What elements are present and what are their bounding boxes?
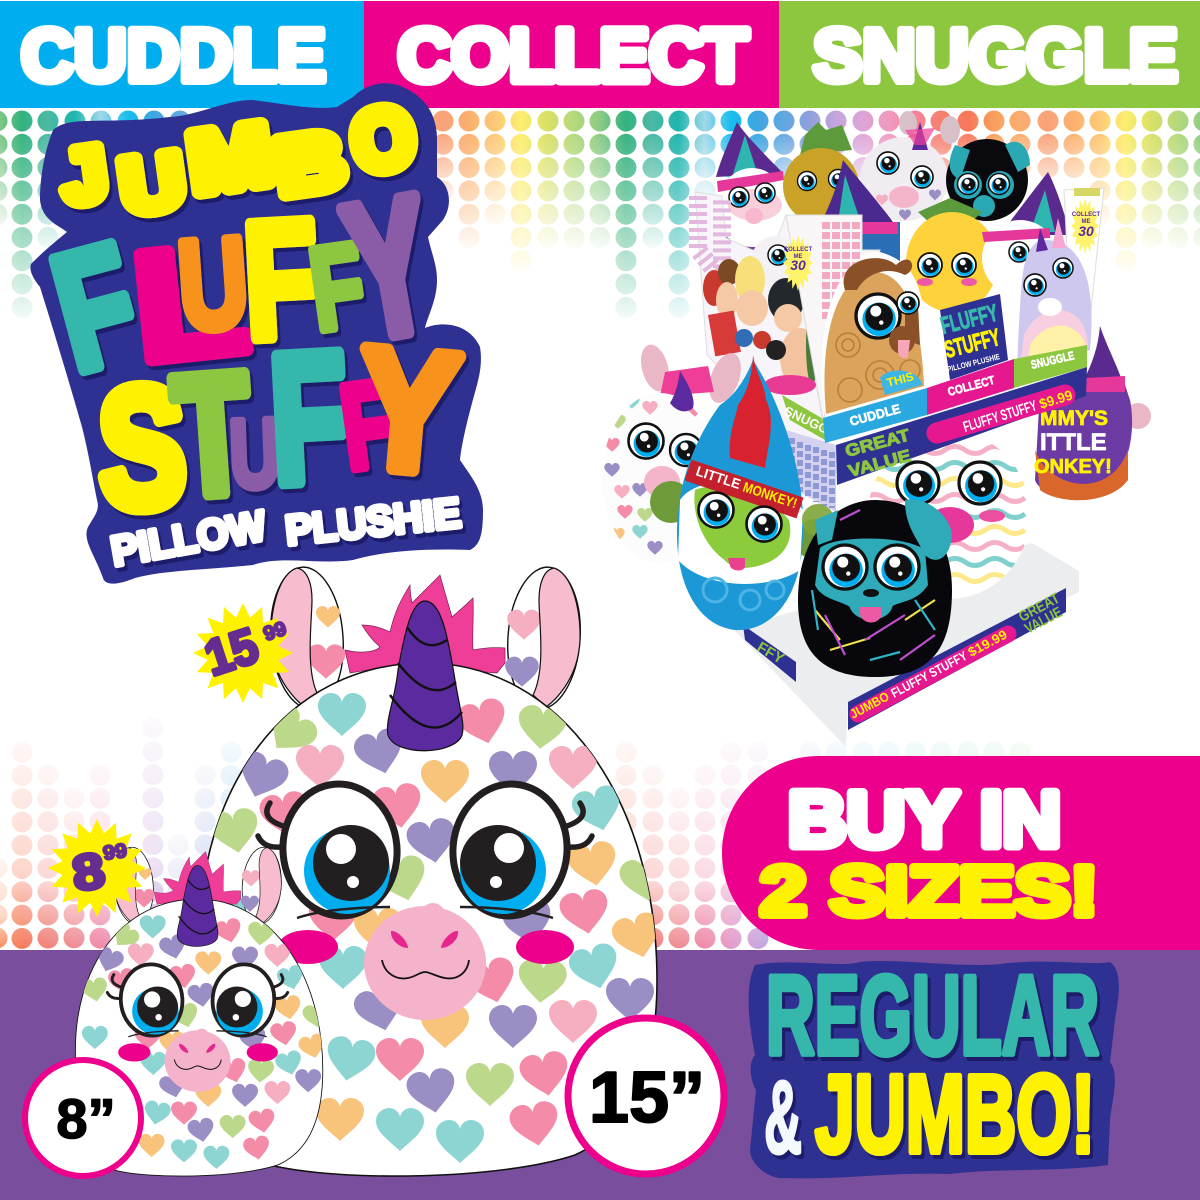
display base tray: FLUFFY STUFFY — [888, 648, 970, 701]
peeking unicorn — [751, 236, 799, 288]
panel: snuggle: SNUGGLE — [813, 14, 1178, 97]
logo word: fluffy: Y — [332, 156, 447, 379]
label: collect: COLLECT — [946, 373, 997, 399]
panel text: snuggle: SNUGGLE — [782, 403, 847, 444]
display stand with plushies — [602, 111, 1151, 747]
horn — [387, 601, 463, 751]
size badge: 8 inch — [25, 1060, 141, 1176]
logo word: jumbo — [56, 89, 421, 231]
body — [199, 663, 657, 1176]
label: navy price band: $9.99 — [1037, 387, 1075, 412]
purple floor band — [0, 950, 1200, 1200]
price burst: 8.99: 99 — [102, 840, 128, 865]
label: navy price band: VALUE — [846, 446, 913, 481]
mane — [345, 575, 505, 673]
logo backing — [30, 83, 483, 584]
logo word: stuffy: S — [95, 352, 189, 545]
plush: left unicorn — [604, 344, 741, 555]
price burst: 15.99 — [193, 603, 293, 703]
plush: black dog back — [946, 139, 1030, 221]
logo word: stuffy: F — [333, 356, 403, 496]
price burst: 8.99: 8 — [69, 842, 108, 902]
plush: brown dog card: THIS — [885, 369, 915, 390]
size badge: 8 inch: 8” — [56, 1087, 116, 1150]
logo: jumbo fluffy stuffy pillow plushie — [30, 83, 483, 584]
display base tray — [736, 543, 1079, 747]
label: navy price band: FLUFFY STUFFY — [961, 397, 1039, 436]
size badge: 15 inch: 15” — [589, 1058, 705, 1138]
plush: black splatter dog — [798, 499, 952, 677]
lower equalizer dots — [0, 712, 1033, 950]
plush: pink monkey back — [716, 122, 788, 250]
text: 2 sizes: 2 SIZES! — [760, 852, 1098, 930]
panel: right card burst: COLLECT — [1072, 212, 1100, 218]
plush: brown dog card — [822, 252, 928, 418]
logo word: fluffy: L — [125, 211, 256, 395]
display label band — [823, 345, 1087, 485]
top rainbow dots — [0, 121, 1200, 318]
plush: yellow pineapple — [906, 198, 998, 312]
pink pill: buy in 2 sizes — [722, 756, 1200, 950]
burst: collect me 30 left: 30 — [790, 257, 806, 273]
left eye — [258, 779, 403, 921]
panel: right card burst: 30 — [1078, 223, 1094, 239]
label: snuggle — [1014, 345, 1087, 388]
logo word: stuffy: Y — [350, 311, 466, 509]
logo subtitle: pillow plushie: PLUSHIE — [283, 489, 463, 554]
plush: wave striped — [870, 444, 1026, 599]
logo: regular and jumbo — [749, 953, 1119, 1178]
panel: cuddle: CUDDLE — [21, 14, 326, 97]
plush: mommy's little monkey right: ONKEY! — [1034, 456, 1112, 478]
panel: collect: COLLECT — [398, 14, 748, 97]
panel: cuddle — [0, 1, 364, 108]
price burst: 15.99: 15 — [198, 617, 265, 686]
display base tray: $19.99 — [965, 627, 1009, 660]
logo word: fluffy — [36, 156, 447, 406]
text: buy in: BUY IN — [788, 775, 1061, 863]
right ear — [503, 565, 585, 711]
plush: small unicorn back — [860, 111, 960, 221]
plush: mommy's little monkey right — [1034, 326, 1151, 500]
logo word: fluffy: F — [302, 218, 372, 355]
panel: right card burst — [1064, 188, 1104, 352]
panel: snuggle — [779, 1, 1200, 108]
display base tray: FFY — [754, 639, 787, 668]
mini fluffy stuffy logo — [938, 294, 1008, 380]
plush: gold pineapple back — [783, 122, 859, 224]
plush: little monkey blue: MONKEY! — [741, 479, 799, 511]
burst: collect me 30 left: COLLECT — [784, 247, 812, 253]
logo word: stuffy — [95, 311, 466, 545]
logo subtitle: pillow plushie: PILLOW — [107, 501, 270, 575]
cheeks — [278, 930, 574, 964]
display base tray: JUMBO — [847, 689, 891, 722]
label: snuggle: SNUGGLE — [1030, 348, 1076, 372]
logo word: stuffy: U — [228, 398, 282, 508]
plush: little monkey blue: LITTLE — [694, 463, 743, 492]
plush: small unicorn — [75, 846, 331, 1176]
left side panel — [695, 192, 847, 512]
logo word: jumbo: M — [183, 106, 277, 211]
logo word: jumbo: O — [346, 89, 421, 191]
label: navy price band — [836, 367, 1087, 485]
logo word: fluffy: F — [36, 208, 155, 406]
panel: front dotted card — [783, 215, 880, 420]
mini fluffy stuffy logo: STUFFY — [942, 324, 1003, 364]
left ear — [266, 565, 348, 711]
logo word: jumbo: U — [115, 136, 190, 231]
muzzle — [364, 903, 486, 1020]
logo subtitle: pillow plushie — [107, 489, 463, 575]
panel characters — [703, 256, 820, 395]
size badge: 15 inch — [568, 1018, 724, 1174]
label: cuddle: CUDDLE — [848, 401, 902, 429]
logo word: jumbo: B — [270, 114, 350, 212]
logo word: stuffy: T — [167, 337, 257, 532]
display base tray: VALUE — [1022, 604, 1065, 638]
price burst: 15.99: 99 — [261, 618, 289, 646]
mini fluffy stuffy logo: FLUFFY — [938, 300, 1001, 340]
plush: large unicorn — [199, 565, 672, 1176]
logo word: stuffy: F — [266, 315, 353, 522]
text: ampersand: & — [764, 1060, 802, 1176]
panel: right card burst: ME — [1082, 219, 1090, 225]
heart pattern — [208, 693, 672, 1163]
display base tray: GREAT — [1016, 590, 1063, 626]
plush: pink monkey right — [982, 172, 1072, 296]
plush: mommy's little monkey right: MMY'S — [1040, 407, 1108, 430]
mini fluffy stuffy logo: PILLOW PLUSHIE — [946, 352, 1001, 374]
panel: collect — [364, 1, 779, 108]
logo word: fluffy: F — [240, 185, 323, 374]
logo word: fluffy: U — [174, 210, 252, 357]
header banner — [0, 1, 1200, 108]
label: navy price band: GREAT — [843, 425, 912, 461]
plush: little monkey blue — [650, 355, 834, 630]
label: collect — [927, 359, 1014, 415]
plush: teal hair monkey middle — [820, 160, 900, 262]
back row plushies — [716, 111, 1072, 312]
logo word: jumbo: J — [56, 130, 112, 221]
burst: collect me 30 left — [783, 235, 813, 291]
right eye — [447, 779, 592, 921]
label: cuddle — [823, 388, 927, 443]
plush: mommy's little monkey right: ITTLE — [1040, 429, 1107, 456]
burst: collect me 30 left: ME — [794, 254, 802, 260]
plush: lavender rainbow unicorn card — [1017, 218, 1092, 372]
price burst: 8.99 — [48, 819, 146, 917]
